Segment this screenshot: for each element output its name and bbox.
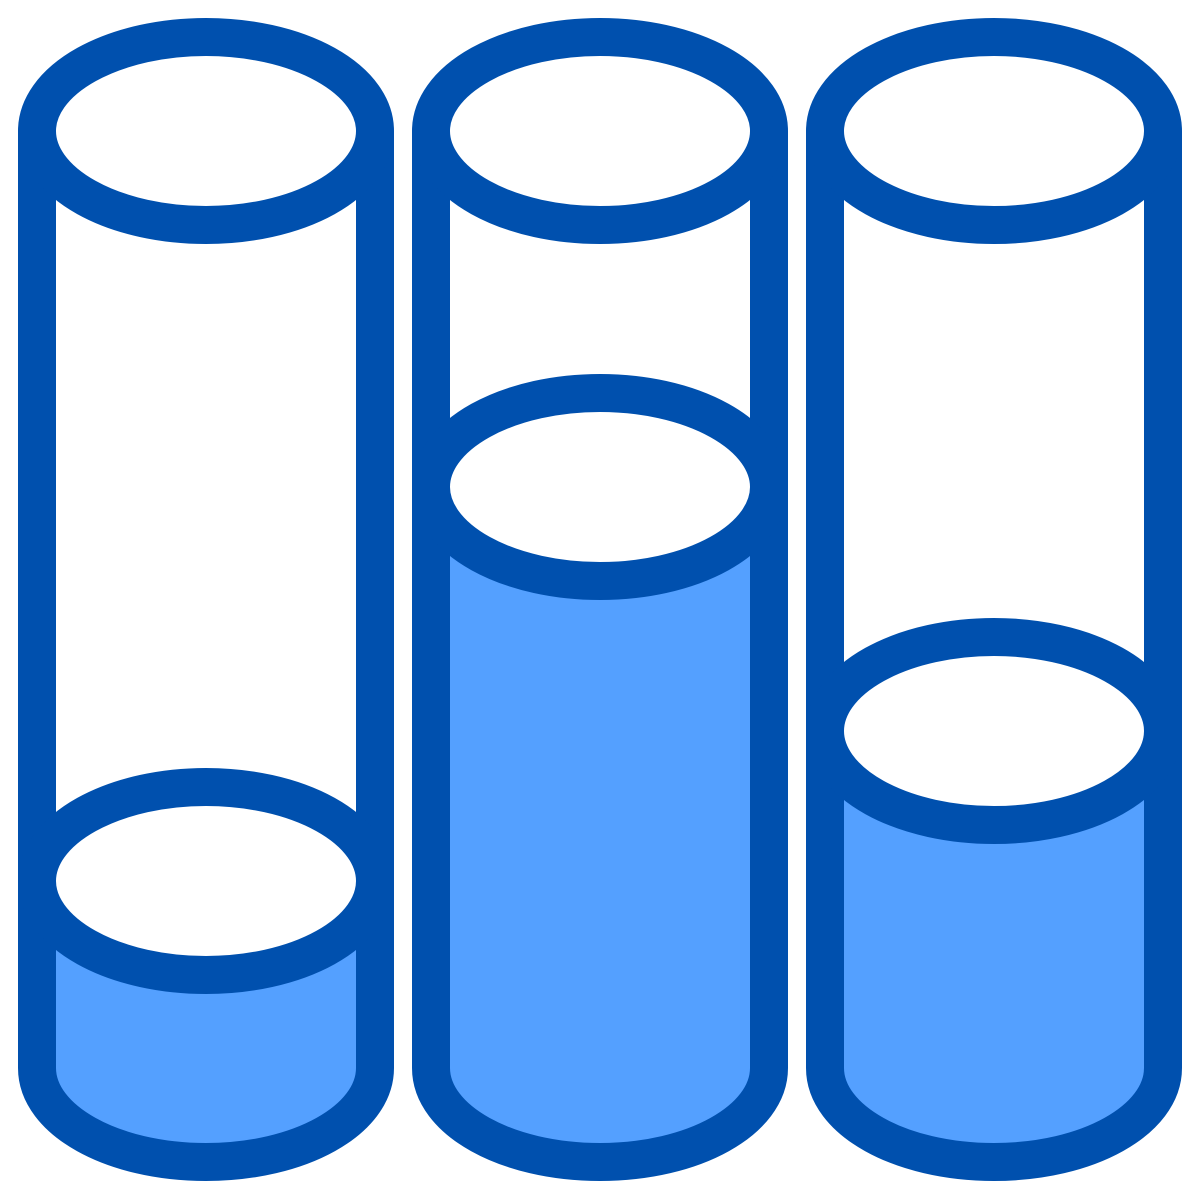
cylinder: left, low level bbox=[37, 37, 375, 1162]
cylinder: middle, high level bbox=[431, 37, 769, 1162]
cylinder: right, medium level bbox=[825, 37, 1163, 1162]
